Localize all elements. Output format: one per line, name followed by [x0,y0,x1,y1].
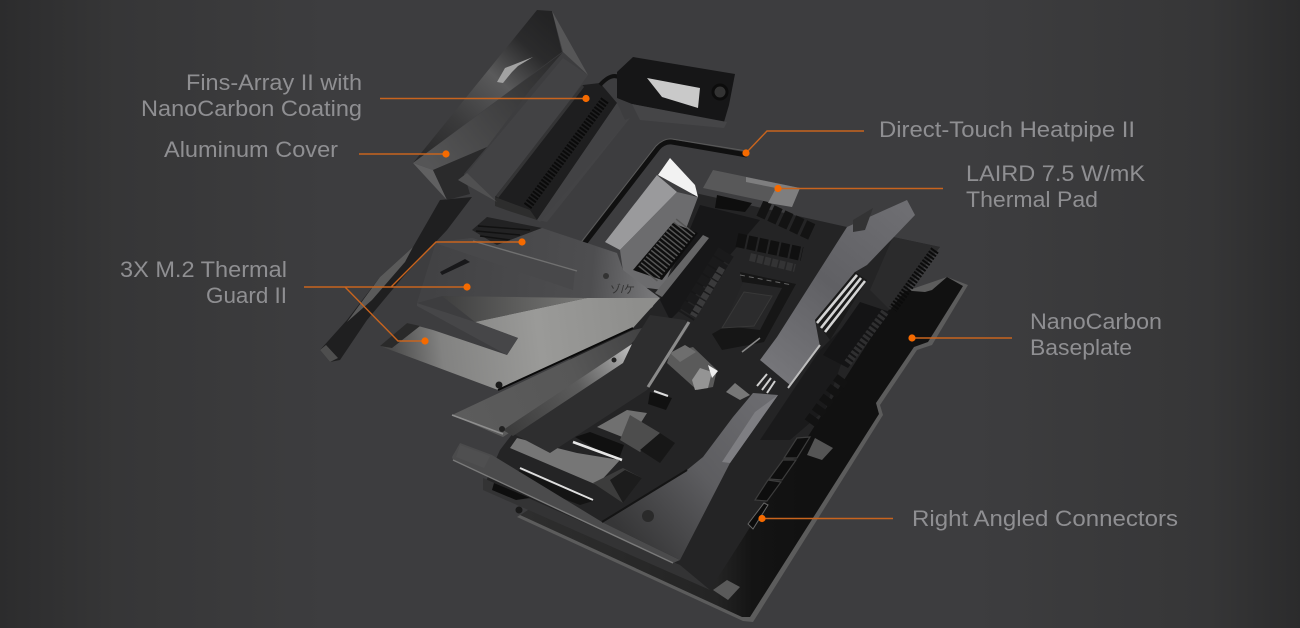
m.2 ridged grille [472,217,542,245]
label: baseplate callout [908,309,1162,360]
right angled connector [748,503,768,529]
label: aluminum cover callout [164,137,450,162]
label: aluminum cover callout: Aluminum Cover [164,137,338,162]
vrm chokes left [686,252,726,316]
label: m.2 thermal guard callout: 3X M.2 Thermal [120,257,287,282]
sata ports [755,437,810,501]
label: fins-array callout: NanoCarbon Coating [141,96,362,121]
label: thermal pad callout: LAIRD 7.5 W/mK [966,161,1145,186]
vrm silver heatsink [605,158,709,297]
cover inner panel [467,58,588,202]
aluminum cover [413,10,588,202]
top vrm block [617,57,735,128]
chipset guard bracket [602,393,778,560]
slot [435,242,575,290]
striped heat fins [815,272,867,340]
side dark strip [497,86,583,197]
24 pin atx connector [823,302,890,368]
motherboard pcb [483,193,940,590]
baseplate standoff [713,580,740,600]
diagonal chipset heatsink shroud [757,200,915,393]
baseplate notch [807,438,833,460]
baseplate [517,277,968,622]
cpu socket [712,272,796,352]
label: thermal pad callout: Thermal Pad [966,187,1098,212]
thermal pad [703,170,800,207]
8 pin power connector [715,195,752,212]
vrm chokes top [760,208,812,232]
label: m.2 thermal guard callout: Guard II [206,283,287,308]
label: right angled connectors callout [758,506,1178,531]
label: direct-touch heatpipe callout [742,117,1135,157]
label: fins-array callout: Fins-Array II with [186,70,362,95]
front io rail [452,443,680,563]
label: direct-touch heatpipe callout: Direct-Touch Heatpipe II [879,117,1135,142]
label: m.2 thermal guard callout [120,238,526,345]
heatpipe [570,142,747,262]
m.2 wedge guard [452,315,690,453]
m.2 thermal guard top plate [417,228,660,308]
logo [497,57,533,83]
label: baseplate callout: Baseplate [1030,335,1132,360]
small striped fins [757,374,775,393]
fins array heatsink [495,83,630,222]
label: thermal pad callout [774,161,1145,212]
heatpipe highlight [575,139,747,250]
edge connector row [893,250,935,309]
middle plate strip [417,303,518,355]
heatpipe top connector [600,76,620,85]
io connector [808,378,843,426]
m.2 thermal guard top plate: ゾ/ケ [610,283,635,296]
label: baseplate callout: NanoCarbon [1030,309,1162,334]
dark board shadow [660,205,760,320]
lower m.2 slots [510,410,675,505]
side bracket strip [320,197,472,362]
label: fins-array callout [141,70,590,121]
label: right angled connectors callout: Right Angled Connectors [912,506,1178,531]
small mid chips [648,345,750,410]
m.2 silver plate [380,296,660,390]
